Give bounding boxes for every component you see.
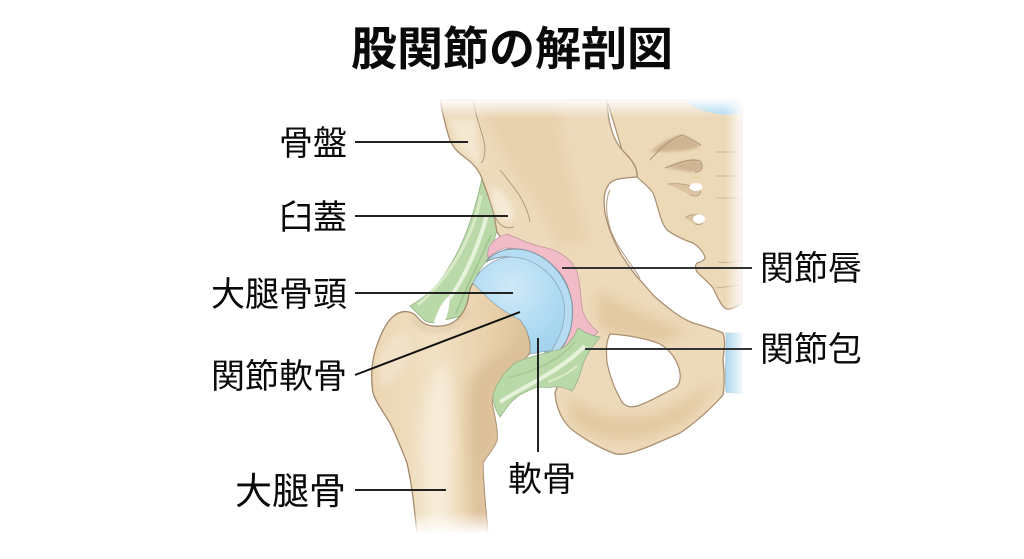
title: 股関節の解剖図 [351,23,673,75]
pelvis shading [450,100,720,441]
pelvis (ilium, pubis, ischium) [440,100,725,454]
cartilage rim [486,249,572,352]
femur shading [378,310,530,534]
upper ligament (joint capsule) [410,178,497,324]
sacral foramina [650,135,742,288]
label: 大腿骨頭: 大腿骨頭 [211,276,347,314]
pelvis contour details [473,100,640,278]
labrum [488,234,598,353]
edge fades [405,95,755,541]
illustration: hip joint anatomy [372,95,755,541]
sacral disc [685,100,742,114]
obturator foramen [606,334,680,407]
label: 関節軟骨 [211,312,520,396]
pubic cartilage [725,333,742,394]
label: 関節唇: 関節唇 [760,250,862,288]
label: 骨盤: 骨盤 [279,125,347,163]
label: 臼蓋: 臼蓋 [279,199,347,237]
label: 大腿骨: 大腿骨 [235,471,346,512]
ligament gap [434,296,450,324]
label: 軟骨: 軟骨 [508,461,576,499]
femur [372,283,530,534]
sacrum [607,100,742,309]
label: 関節軟骨: 関節軟骨 [211,358,347,396]
lower ligament (joint capsule) [493,328,600,417]
label: 関節包: 関節包 [760,331,862,369]
femoral head [473,257,565,354]
